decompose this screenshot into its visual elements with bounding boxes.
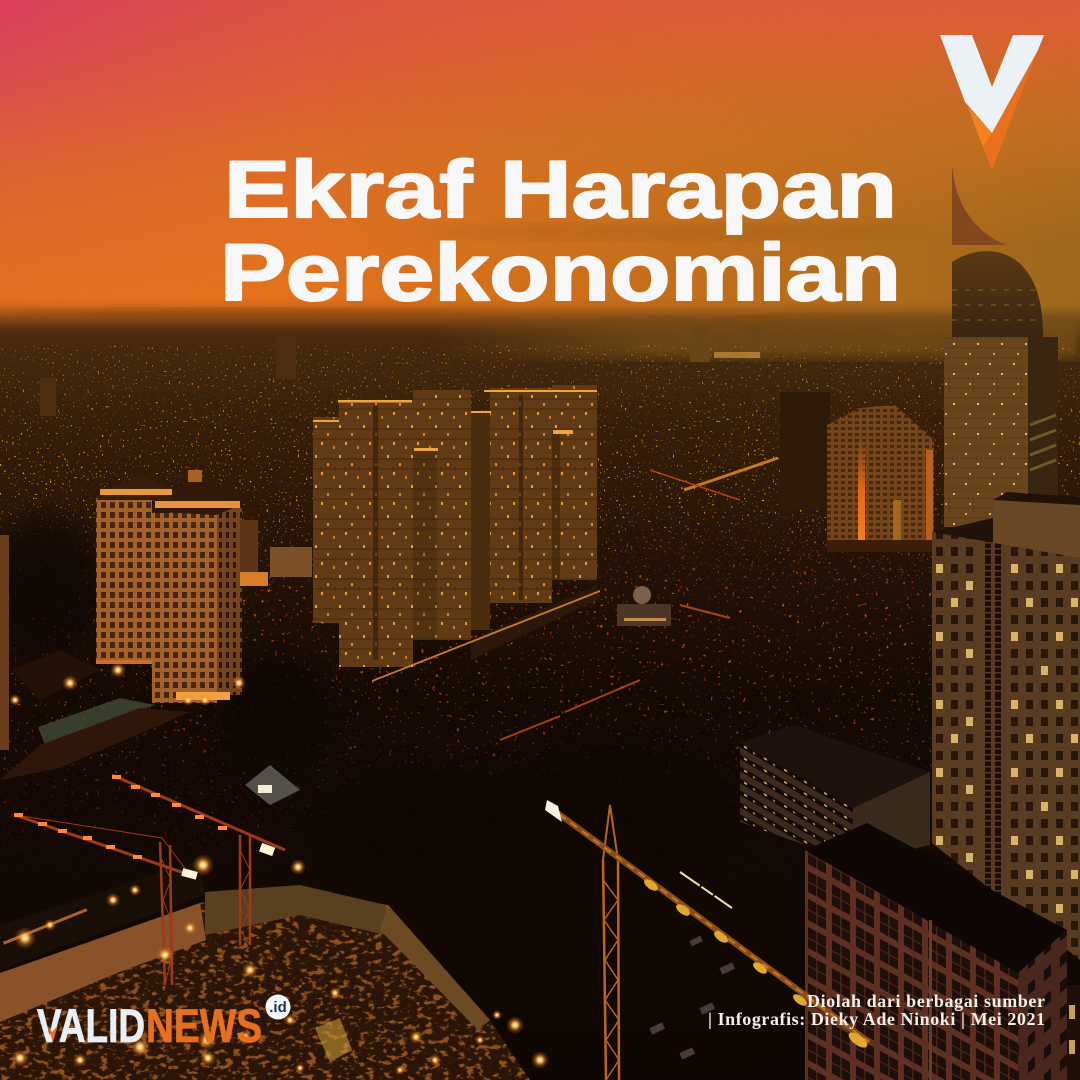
- title: [220, 145, 901, 318]
- left low buildings and cranes: [0, 535, 300, 985]
- title line 2: Perekonomian: [220, 228, 901, 318]
- dark tree patches: [0, 495, 790, 900]
- sky background: [0, 0, 1080, 350]
- spire: [952, 165, 1006, 245]
- lit sections: [642, 877, 870, 1051]
- logo: Validnews wordmark: [37, 994, 290, 1052]
- construction floodlights: [9, 662, 549, 1075]
- construction pit: [0, 885, 530, 1080]
- Wisma 46 tower: [944, 165, 1058, 527]
- dome: [952, 251, 1043, 337]
- yellow scaffold: [315, 1018, 352, 1062]
- lit roof edges: [313, 390, 597, 451]
- photo: city ground: [0, 306, 1080, 1080]
- far wall: [205, 885, 386, 935]
- mast: [603, 805, 619, 1080]
- mosque: [617, 586, 671, 626]
- source credit: [708, 991, 1045, 1029]
- near city lights: [0, 524, 952, 868]
- low hall: [38, 698, 155, 745]
- front brick building: [805, 823, 1080, 1080]
- tower B front face: [152, 513, 217, 703]
- street glows: [500, 458, 778, 740]
- central apartment towers: [313, 385, 600, 682]
- podium: [471, 585, 597, 660]
- bright floodlight panels: [181, 868, 198, 880]
- tower B side face: [217, 505, 242, 695]
- tower A: [96, 498, 152, 664]
- credit line 2: | Infografis: Dieky Ade Ninoki | Mei 2021: [708, 1009, 1045, 1029]
- glass side: [1028, 337, 1058, 502]
- crane B: [112, 775, 285, 945]
- badge .id: [266, 994, 290, 1020]
- wordmark V accent: [47, 1025, 58, 1042]
- title line 1: Ekraf Harapan: [224, 145, 897, 235]
- jib: [548, 806, 869, 1042]
- distant skyline: [40, 326, 830, 510]
- crane A: [15, 815, 190, 985]
- parked cars: [649, 936, 735, 1060]
- tower shadow strips: [373, 395, 560, 660]
- shaft face: [944, 337, 1028, 527]
- distant city lights: [0, 345, 1080, 605]
- front tall tower: [932, 492, 1080, 960]
- wordmark white part: VALID: [37, 999, 145, 1052]
- logo: V mark: [940, 35, 1044, 170]
- small side buildings: [240, 520, 258, 575]
- badge .id: .id: [269, 999, 287, 1016]
- right mid hotel: [827, 405, 934, 552]
- mid grey building: [740, 725, 930, 862]
- left road: [0, 860, 205, 970]
- left hotel towers: [96, 470, 312, 703]
- tower crane centre: [545, 800, 870, 1080]
- credit line 1: Diolah dari berbagai sumber: [807, 991, 1045, 1011]
- retaining wall: [0, 903, 206, 1022]
- lit crowns: [96, 470, 241, 700]
- wordmark orange part: NEWS: [146, 999, 262, 1052]
- jib lights: [14, 775, 227, 859]
